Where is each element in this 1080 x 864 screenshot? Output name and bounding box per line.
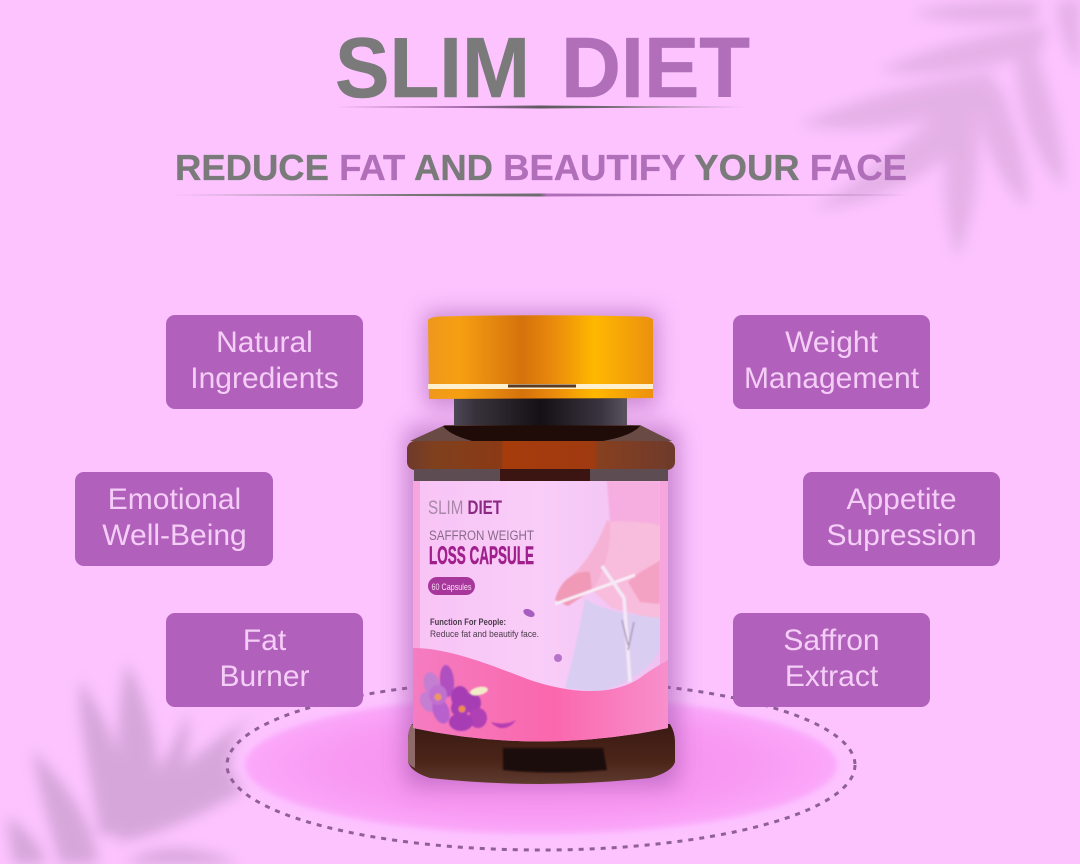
- decorative palm shadow: bottom left: [8, 663, 268, 864]
- label function text: Reduce fat and beautify face.: [430, 629, 539, 640]
- decorative palm shadow: top right: [800, 0, 1080, 257]
- feature: Emotional Well-Being: [75, 472, 273, 566]
- label function text: Function For People:: [430, 617, 506, 628]
- title: [335, 21, 750, 116]
- feature: Appetite Supression: Appetite: [846, 483, 957, 516]
- feature: Fat Burner: Burner: [219, 660, 310, 693]
- feature: Weight Management: Weight: [785, 326, 879, 359]
- bottle base: [408, 724, 675, 784]
- feature: Emotional Well-Being: Well-Being: [102, 519, 247, 552]
- bottle neck: [454, 398, 627, 428]
- feature: Natural Ingredients: Ingredients: [190, 362, 339, 395]
- label brand: SLIM DIET: [428, 498, 502, 519]
- label backing: [413, 481, 668, 742]
- feature: Saffron Extract: [733, 613, 930, 707]
- subtitle underline: [172, 194, 908, 196]
- label pill: 60 Capsules: [432, 582, 472, 593]
- bottle cap: [428, 315, 653, 399]
- feature: Weight Management: Management: [744, 362, 920, 395]
- bottle body band: [414, 469, 668, 482]
- feature: Fat Burner: [166, 613, 363, 707]
- bottle shoulder: [407, 425, 675, 470]
- title: DIET: [561, 21, 750, 116]
- label product name: LOSS CAPSULE: [429, 542, 534, 570]
- subtitle: REDUCE FAT AND BEAUTIFY YOUR FACE: [175, 147, 907, 188]
- icon: saffron flower: [416, 664, 516, 731]
- feature: Weight Management: [733, 315, 930, 409]
- label pale panel: [420, 481, 660, 696]
- feature: Natural Ingredients: [166, 315, 363, 409]
- podium ellipse: [227, 680, 855, 850]
- label pink wave: [413, 648, 668, 742]
- icon: floating petals: [522, 607, 562, 662]
- label product line: SAFFRON WEIGHT: [429, 528, 534, 543]
- feature: Natural Ingredients: Natural: [216, 326, 313, 359]
- feature: Saffron Extract: Saffron: [783, 624, 880, 657]
- title: SLIM: [335, 21, 530, 116]
- feature: Appetite Supression: [803, 472, 1000, 566]
- feature: Emotional Well-Being: Emotional: [108, 483, 241, 516]
- title underline: [335, 106, 745, 108]
- feature: Saffron Extract: Extract: [785, 660, 879, 693]
- feature: Fat Burner: Fat: [243, 624, 287, 657]
- label model figure: [555, 481, 660, 692]
- feature: Appetite Supression: Supression: [826, 519, 977, 552]
- label function text: [430, 617, 539, 640]
- label pill: [428, 577, 475, 595]
- bottle glow: [404, 312, 679, 787]
- product bottle: [404, 312, 679, 787]
